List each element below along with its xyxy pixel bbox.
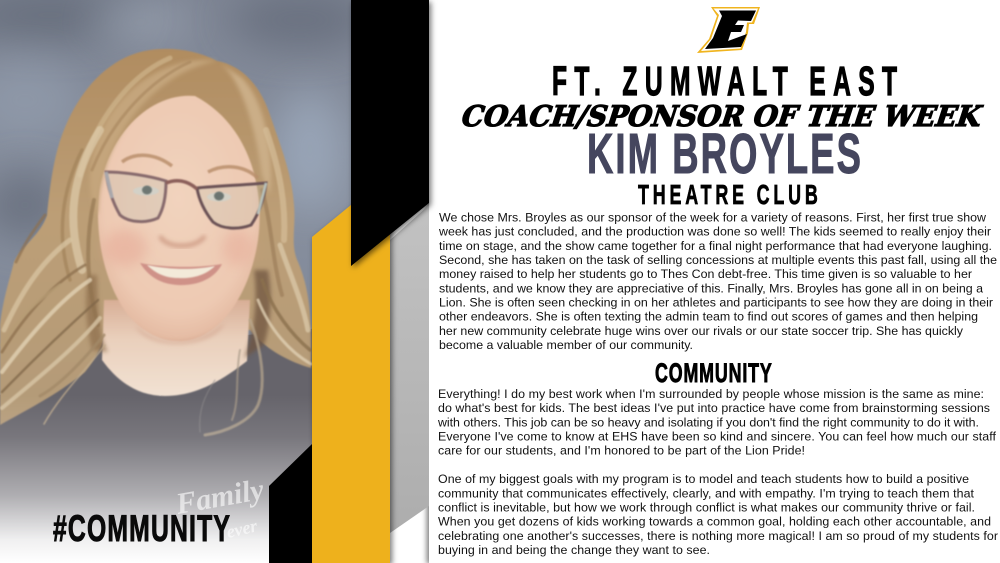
text block: why chosen: We chose Mrs. Broyles as our sponsor of the week for a variety of reasons. First, her first true show	[439, 210, 986, 224]
hair strands	[2, 58, 311, 435]
hair mass	[0, 49, 311, 425]
text block: why chosen	[438, 210, 997, 352]
eyes	[133, 186, 159, 196]
shirt print: Family	[173, 473, 267, 521]
text block: community paragraph one: Everything! I do my best work when I'm surrounded by people whose mission is the same as mine:	[438, 387, 984, 401]
title: school name: FT. ZUMWALT EAST	[552, 59, 897, 105]
text block: community paragraph one: with others. This job can be so heavy and isolating if you don't find the right community to do it with.	[437, 415, 979, 429]
text block: community paragraph two	[438, 472, 998, 557]
text block: community paragraph one	[437, 387, 997, 458]
chin shadow	[138, 326, 222, 346]
heading: community: COMMUNITY	[655, 357, 772, 388]
eyebrows	[122, 155, 172, 166]
icon: school E logo	[697, 7, 760, 53]
shape: lower black ribbon	[269, 444, 312, 563]
text block: community paragraph two: One of my biggest goals with my program is to model and teach students how to build a positive	[438, 472, 969, 486]
heading: coach of the week: COACH/SPONSOR OF THE WEEK	[457, 100, 988, 133]
neck	[102, 300, 250, 396]
hair shadow by the neck	[86, 275, 108, 352]
hair front sweeps	[90, 60, 217, 215]
text block: community paragraph two: conflict is inevitable, but how we work through conflict is what makes our community thrive or fail.	[438, 500, 975, 514]
text block: why chosen: money raised to help her students go to Thes Con debt-free. This time given is so valuable to her	[439, 267, 972, 281]
text block: why chosen: other endeavors. She is often texting the admin team to find out scores of games and then helping	[439, 310, 978, 324]
shirt	[0, 328, 312, 526]
shirt print: ever	[224, 515, 260, 542]
text block: why chosen: students, and we know they are appreciative of this. Finally, Mrs. Broyles has gone all in on being a	[439, 281, 983, 295]
text block: why chosen: Second, she has taken on the task of selling concessions at multiple events this past fall, using all the	[439, 253, 997, 267]
text block: why chosen: Lion. She is often seen checking in on her athletes and participants to see how they are doing in their	[439, 296, 993, 310]
text block: community paragraph two: community that communicates effectively, clearly, and with empathy. I'm trying to teach them that	[438, 486, 975, 500]
shape: upper black ribbon	[351, 0, 429, 266]
shirt print	[178, 480, 263, 538]
text block: why chosen: week has just concluded, and the production was done so well! The kids seemed to really enjoy their	[438, 225, 991, 239]
text block: community paragraph one: do what's best for kids. The best ideas I've put into practice have come from brainstorming sessions	[438, 401, 990, 415]
text block: why chosen: become a valuable member of our community.	[439, 338, 693, 352]
text block: why chosen: time on stage, and the show came together for a final night performance that had everyone laughing.	[439, 239, 992, 253]
text block: community paragraph one: Everyone I've come to know at EHS have been so kind and sincere. You can feel how much our staff	[438, 430, 997, 444]
panel: white content background	[429, 0, 1000, 563]
mouth	[140, 263, 222, 285]
heading: name: KIM BROYLES	[587, 123, 861, 186]
cheeks	[103, 230, 147, 266]
text block: community paragraph two: buying in and being the change they want to see.	[438, 543, 710, 557]
shape: gold ribbon	[312, 205, 390, 563]
face	[98, 96, 260, 341]
nose	[160, 236, 205, 246]
text block: community paragraph one: care for our students, and I'm honored to be part of the Lion Pride!	[438, 444, 805, 458]
text block: why chosen: her new community celebrate huge wins over our rivals or our state soccer trip. She has quickly	[439, 324, 964, 338]
hashtag: #COMMUNITY	[53, 507, 230, 549]
heading: club: THEATRE CLUB	[638, 179, 818, 210]
fade to white	[0, 414, 312, 563]
shape: gray ribbon	[390, 205, 429, 533]
text block: community paragraph two: When you get dozens of kids working towards a common goal, holding each other accountable, and	[438, 515, 991, 529]
text block: community paragraph two: celebrating one another's successes, there is nothing more magical! I am so proud of my students for	[438, 529, 998, 543]
panel: portrait photo	[0, 0, 370, 563]
glasses	[106, 172, 266, 228]
